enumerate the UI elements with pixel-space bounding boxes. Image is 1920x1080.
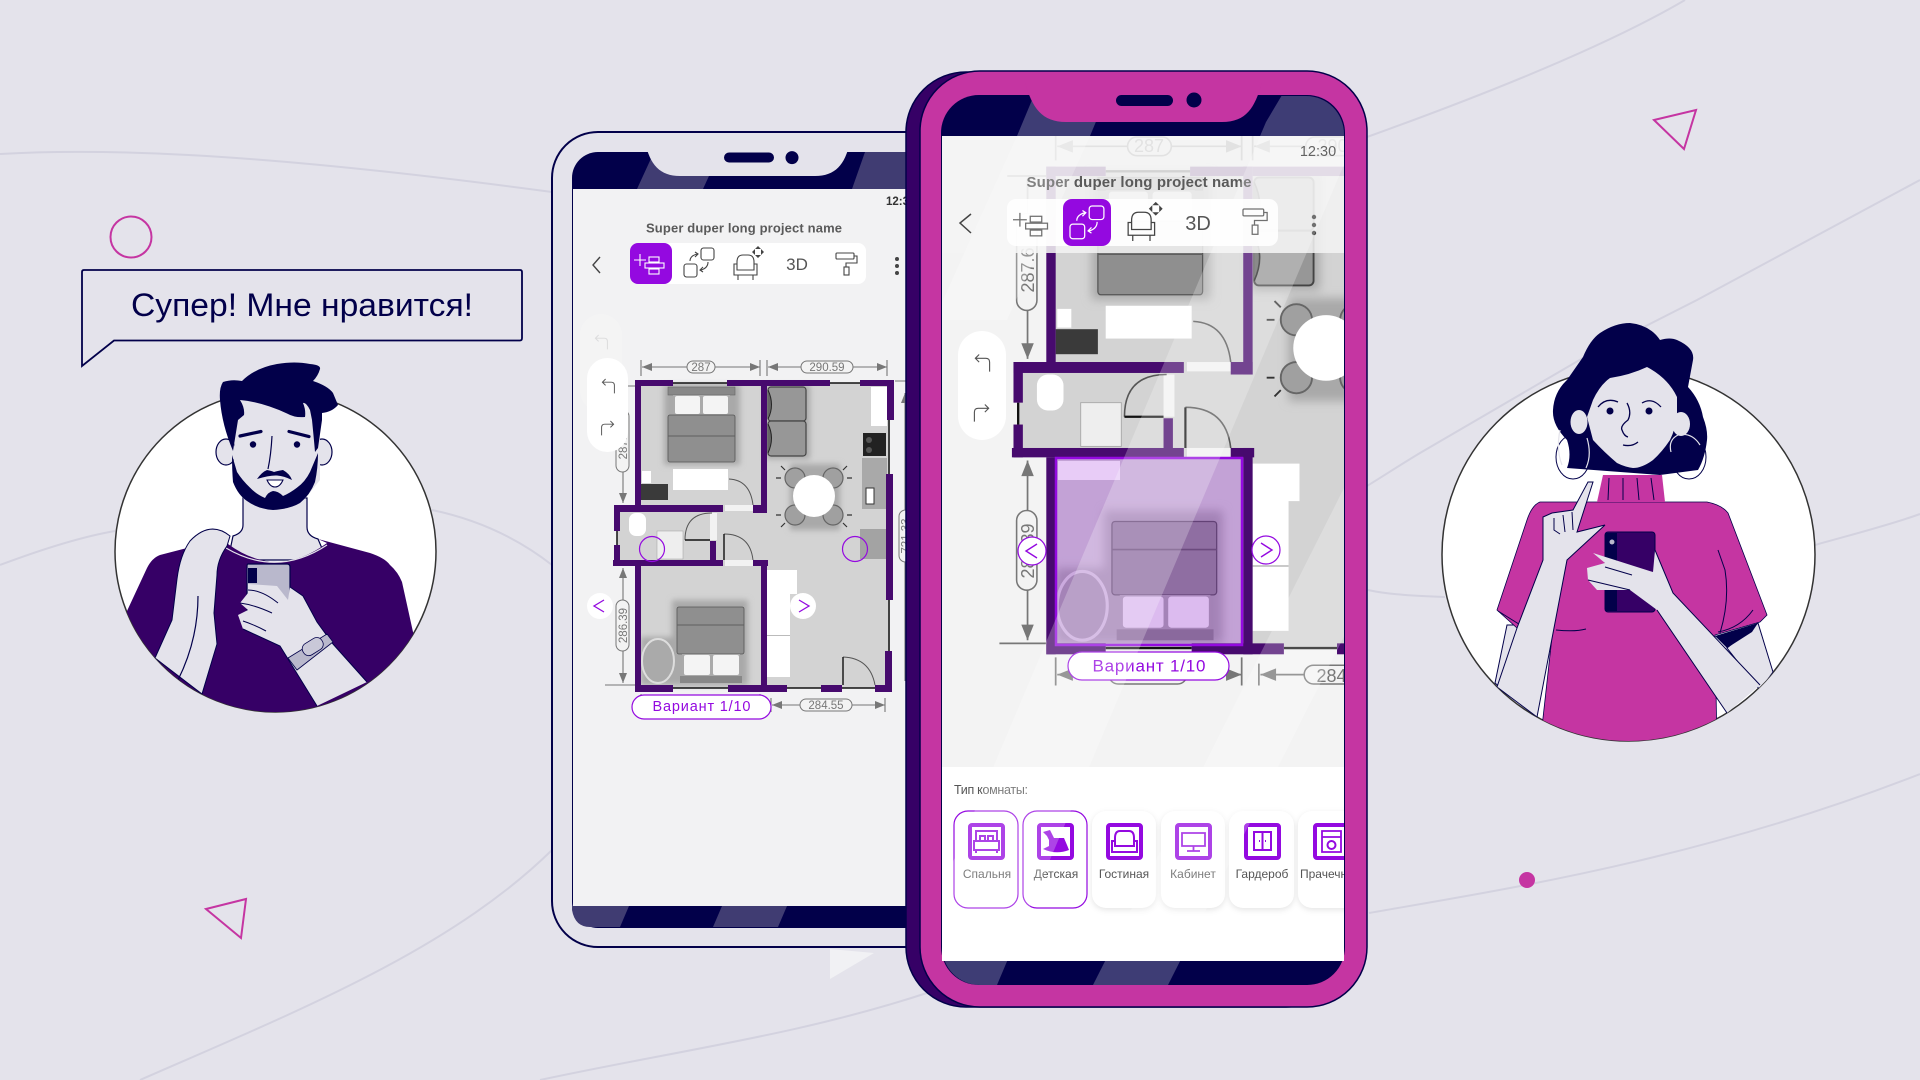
back phone faded undo control: [580, 314, 622, 412]
back phone floor plan: [605, 360, 913, 712]
decor: pink dot: [1519, 872, 1535, 888]
back phone bottom reflections: [572, 906, 787, 927]
front phone time: 12:30: [1300, 144, 1336, 160]
woman earrings outer: [1556, 435, 1706, 479]
card: nursery: [1023, 811, 1087, 908]
front phone floor plan: 286.39: [1018, 523, 1038, 579]
decor: pink circle: [110, 216, 152, 258]
decor: triangle right: [1654, 110, 1696, 149]
front phone diagonal reflections: [944, 96, 1344, 985]
card: bedroom: [954, 811, 1018, 908]
front phone toolbar: 3D: [1185, 213, 1211, 235]
back phone speaker: [724, 152, 774, 162]
woman right arm: [1587, 550, 1760, 713]
front phone toolbar: [1007, 199, 1278, 246]
front phone header band: [942, 136, 1344, 253]
back phone chevron: [593, 257, 600, 273]
back phone right arrow: [790, 593, 816, 619]
back phone left arrow: [587, 593, 613, 619]
back phone floor plan: 721.33: [900, 518, 912, 554]
front phone variant pill: [1068, 652, 1229, 680]
back phone: [551, 131, 906, 948]
front phone floor plan: 287: [1134, 136, 1164, 156]
back phone variant pill: [632, 695, 771, 719]
back phone floor plan: 284.55: [808, 700, 844, 712]
front phone menu dots: [1312, 215, 1316, 235]
front phone title: Super duper long project name: [1026, 174, 1252, 191]
back phone time: 12:30: [886, 196, 915, 208]
front phone left arrow: [1018, 537, 1046, 565]
front phone chevron: [960, 214, 971, 233]
back phone title: Super duper long project name: [646, 220, 842, 236]
back phone reflections: [637, 152, 972, 189]
front phone floor plan: 290.59: [1317, 136, 1373, 156]
back phone camera: [786, 151, 798, 164]
card: bedroom: Спальня: [963, 867, 1011, 881]
man hand: [238, 584, 367, 706]
card: office: [1161, 811, 1225, 908]
back phone floor plan: 287.6: [618, 431, 630, 459]
front phone: [905, 70, 1368, 1008]
speech bubble: [82, 270, 522, 366]
back phone floor plan: 290.59: [809, 362, 845, 374]
decor: white triangle: [830, 949, 874, 979]
woman pointing arm: [1497, 482, 1605, 717]
front phone notch: [1025, 82, 1262, 122]
back phone bezel: [572, 152, 972, 928]
front phone bezel: [941, 95, 1345, 985]
front phone floor plan: [999, 136, 1344, 686]
room cards: [954, 811, 1362, 908]
front phone right arrow: [1252, 536, 1280, 564]
woman phone: [1605, 532, 1655, 612]
man head: [216, 362, 338, 510]
back phone screen: [573, 189, 973, 906]
front phone pink body: [920, 71, 1367, 1007]
woman face: [1558, 367, 1700, 468]
front phone variant pill: Вариант 1/10: [1092, 656, 1206, 676]
front phone undo control: [958, 331, 1006, 440]
back phone toolbar: [630, 243, 866, 284]
card: office: Кабинет: [1170, 867, 1216, 881]
front phone floor plan: 287.6: [1018, 247, 1038, 293]
front phone selected room: [1056, 458, 1242, 645]
character: man with phone: [115, 362, 436, 720]
man watch: [288, 634, 333, 670]
card: wardrobe: [1229, 811, 1294, 908]
front phone camera: [1186, 92, 1202, 108]
room type heading: Тип комнаты:: [954, 783, 1028, 797]
character: woman with phone: [1442, 323, 1815, 745]
back phone floor plan: 287: [691, 362, 711, 374]
back phone notch: [645, 142, 850, 176]
front phone speaker: [1116, 95, 1173, 106]
back phone menu dots: [895, 257, 899, 275]
card: wardrobe: Гардероб: [1236, 867, 1289, 881]
card: laundry: Прачечная: [1300, 867, 1360, 881]
back phone floor plan: 286.39: [618, 608, 630, 643]
speech bubble text: Супер! Мне нравится!: [131, 287, 473, 323]
woman body: [1495, 475, 1773, 745]
back phone variant pill: Вариант 1/10: [652, 699, 750, 715]
card: living room: [1092, 811, 1156, 908]
front phone screen: [942, 136, 1344, 961]
card: nursery: Детская: [1034, 867, 1078, 881]
man body: [127, 497, 414, 712]
back phone toolbar: 3D: [786, 255, 808, 274]
card: living room: Гостиная: [1099, 867, 1149, 881]
back phone marker circles: [640, 536, 868, 562]
card: laundry: [1296, 821, 1344, 912]
decor: triangle left: [206, 899, 246, 938]
back phone undo control: [587, 358, 628, 452]
front phone shadow body: [906, 72, 1346, 1007]
back phone frame: [552, 132, 972, 947]
woman hair back: [1553, 323, 1707, 475]
front phone floor plan: 284.55: [1316, 666, 1372, 686]
room type panel: [942, 767, 1362, 961]
